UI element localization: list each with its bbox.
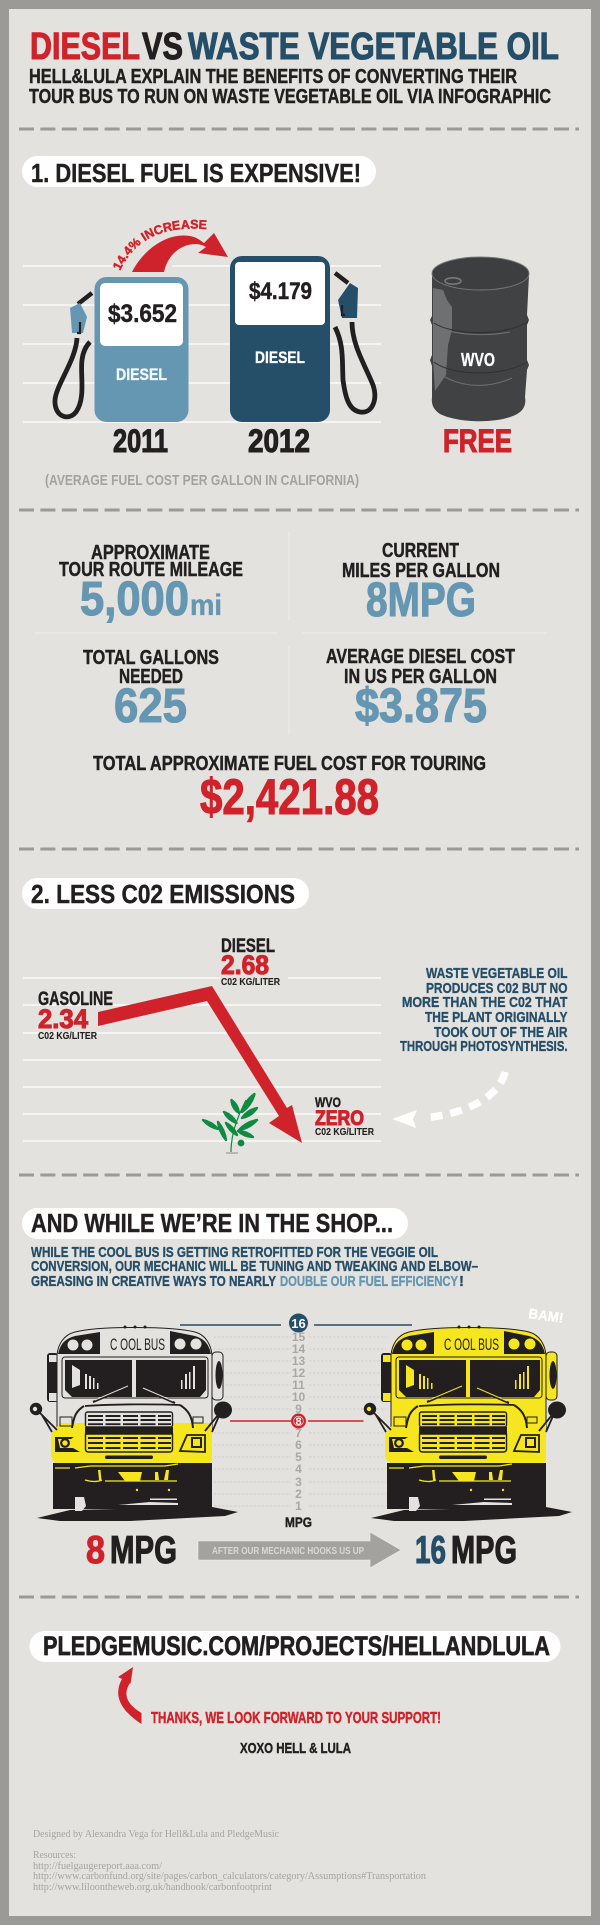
- stat: tour mileage: mi: [190, 589, 222, 622]
- free label: FREE: [443, 423, 512, 459]
- chart: mpg scale: 1: [295, 1499, 302, 1513]
- callout: photosynthesis note: TOOK OUT OF THE AIR: [434, 1024, 568, 1041]
- icon: oil barrel: [430, 257, 529, 421]
- stat: total gallons: NEEDED: [119, 666, 183, 688]
- label: 16 mpg: MPG: [451, 1529, 517, 1572]
- title: VS: [142, 26, 183, 68]
- stat: average diesel cost: AVERAGE DIESEL COST: [326, 646, 515, 668]
- arrow: after our mechanic: AFTER OUR MECHANIC HOOKS US UP: [212, 1545, 364, 1557]
- chart: mpg scale: 13: [292, 1354, 305, 1368]
- caption: (AVERAGE FUEL COST PER GALLON IN CALIFORNIA): [45, 472, 359, 489]
- footer credits: [33, 1829, 427, 1893]
- title: DIESEL: [30, 26, 140, 68]
- arrow: curved red: [118, 1667, 142, 1724]
- label: diesel: DIESEL: [221, 936, 275, 957]
- stat: miles per gallon: [342, 540, 500, 627]
- panel: pledge call to action: [30, 1631, 560, 1757]
- chart: mpg scale: 14: [292, 1342, 305, 1356]
- paragraph: CONVERSION, OUR MECHANIC WILL BE TUNING AND TWEAKING AND ELBOW–: [31, 1258, 478, 1275]
- thanks message: THANKS, WE LOOK FORWARD TO YOUR SUPPORT!: [151, 1710, 441, 1727]
- total fuel cost: TOTAL APPROXIMATE FUEL COST FOR TOURING: [93, 753, 486, 775]
- stat: tour mileage: APPROXIMATE: [91, 542, 210, 564]
- chart: mpg scale: 16: [291, 1316, 306, 1331]
- pump 2012: [230, 256, 330, 422]
- label: wvo: [315, 1094, 375, 1138]
- stat: miles per gallon: MILES PER GALLON: [342, 560, 500, 582]
- total fuel cost: [93, 753, 486, 825]
- label: gasoline: [38, 989, 113, 1042]
- stat: average diesel cost: [326, 646, 515, 733]
- label: wvo: WVO: [315, 1094, 341, 1110]
- icon: bus after: C OOL BUS: [444, 1335, 499, 1354]
- subtitle: [29, 66, 551, 108]
- label: 8 mpg: MPG: [110, 1529, 177, 1572]
- year labels: 2012: [248, 423, 310, 459]
- year labels: 2011: [113, 423, 168, 459]
- title: [30, 26, 559, 68]
- chart: mpg scale: 9: [295, 1402, 302, 1416]
- paragraph: [31, 1244, 478, 1290]
- chart: mpg scale: 15: [292, 1330, 305, 1344]
- pump 2012: $4.179: [249, 278, 312, 305]
- stat: miles per gallon: CURRENT: [382, 540, 459, 562]
- arrow: emissions line: [98, 986, 302, 1143]
- label: gasoline: GASOLINE: [38, 989, 113, 1010]
- arrow: white dashed pointer: [392, 1072, 505, 1128]
- panel: diesel fuel is expensive: [22, 156, 530, 489]
- panel: co2 emissions: [22, 878, 568, 1153]
- chart: mpg scale: 11: [292, 1378, 305, 1392]
- chart: mpg scale: MPG: [285, 1514, 312, 1530]
- signature: XOXO HELL & LULA: [240, 1740, 351, 1757]
- icon: bus after: [364, 1326, 572, 1521]
- stat: total gallons: [83, 647, 219, 733]
- bam label: BAM!: [528, 1305, 564, 1326]
- total fuel cost: $2,421.88: [200, 769, 379, 825]
- stat: tour mileage: TOUR ROUTE MILEAGE: [59, 559, 243, 581]
- chart: mpg scale: 4: [295, 1462, 302, 1476]
- icon: left hose and nozzle: [55, 293, 92, 417]
- pump 2012: DIESEL: [255, 348, 305, 367]
- label: diesel: 2.68: [221, 950, 269, 980]
- chart: mpg scale: 10: [292, 1390, 305, 1404]
- increase arrow: 14.4% INCREASE: [113, 220, 207, 271]
- stat: average diesel cost: $3.875: [355, 680, 487, 733]
- panel: touring cost stats: [35, 532, 547, 825]
- icon: right hose and nozzle: [335, 273, 375, 412]
- callout: photosynthesis note: MORE THAN THE C02 THAT: [402, 994, 568, 1011]
- footer credits: Resources:: [33, 1850, 76, 1861]
- heading pill 1: 1. DIESEL FUEL IS EXPENSIVE!: [31, 158, 361, 188]
- label: 16 mpg: 16: [415, 1529, 446, 1572]
- label: diesel: [221, 936, 281, 988]
- chart: mpg scale: 2: [295, 1487, 302, 1501]
- paragraph: !: [459, 1273, 464, 1290]
- label: wvo: ZERO: [315, 1107, 364, 1130]
- label: 16 mpg: [415, 1529, 517, 1572]
- icon: bus before: [30, 1326, 238, 1521]
- pump 2011: DIESEL: [116, 365, 167, 384]
- stat: tour mileage: [59, 542, 243, 626]
- footer credits: http://www.liloontheweb.org.uk/handbook/carbonfootprint: [33, 1882, 272, 1893]
- paragraph: WHILE THE COOL BUS IS GETTING RETROFITTED FOR THE VEGGIE OIL: [31, 1244, 438, 1261]
- label: 8 mpg: [86, 1529, 177, 1572]
- label: wvo: C02 KG/LITER: [315, 1127, 375, 1138]
- footer credits: http://www.carbonfund.org/site/pages/carbon_calculators/category/Assumptions#Transportation: [33, 1871, 427, 1882]
- label: 8 mpg: 8: [86, 1529, 105, 1572]
- chart: mpg scale: 5: [295, 1450, 302, 1464]
- stat: tour mileage: 5,000: [80, 573, 189, 626]
- callout: photosynthesis note: THE PLANT ORIGINALLY: [425, 1009, 568, 1026]
- icon: oil barrel: WVO: [461, 350, 495, 370]
- footer credits: Designed by Alexandra Vega for Hell&Lula and PledgeMusic: [33, 1829, 279, 1840]
- year labels: [113, 423, 310, 459]
- icon: green plant: [203, 1094, 257, 1153]
- pump 2011: $3.652: [108, 300, 177, 328]
- callout: photosynthesis note: PRODUCES C02 BUT NO: [426, 980, 568, 997]
- label: gasoline: C02 KG/LITER: [38, 1031, 98, 1042]
- heading pill 3: AND WHILE WE’RE IN THE SHOP...: [31, 1208, 393, 1238]
- panel: while we're in the shop: [22, 1208, 572, 1572]
- chart: mpg scale: 12: [292, 1366, 305, 1380]
- stat: total gallons: 625: [114, 680, 187, 733]
- heading pill 2: 2. LESS C02 EMISSIONS: [31, 879, 295, 909]
- icon: bus before: C OOL BUS: [110, 1335, 165, 1354]
- pump 2011: [94, 277, 188, 422]
- chart: mpg scale: [180, 1314, 412, 1530]
- footer credits: http://fuelgaugereport.aaa.com/: [33, 1861, 162, 1872]
- chart: mpg scale: 8: [295, 1416, 302, 1428]
- stat: miles per gallon: 8MPG: [366, 574, 476, 627]
- chart: mpg scale: 3: [295, 1475, 302, 1489]
- chart: mpg scale: 7: [295, 1426, 302, 1440]
- stat: average diesel cost: IN US PER GALLON: [344, 666, 497, 688]
- callout: photosynthesis note: WASTE VEGETABLE OIL: [426, 965, 568, 982]
- callout: photosynthesis note: [400, 965, 568, 1055]
- label: diesel: C02 KG/LITER: [221, 977, 281, 988]
- paragraph: DOUBLE OUR FUEL EFFICIENCY: [280, 1273, 458, 1290]
- chart: mpg scale: 6: [295, 1438, 302, 1452]
- arrow: after our mechanic: [198, 1532, 401, 1568]
- label: gasoline: 2.34: [38, 1004, 88, 1034]
- stat: total gallons: TOTAL GALLONS: [83, 647, 219, 669]
- paragraph: GREASING IN CREATIVE WAYS TO NEARLY: [31, 1273, 276, 1290]
